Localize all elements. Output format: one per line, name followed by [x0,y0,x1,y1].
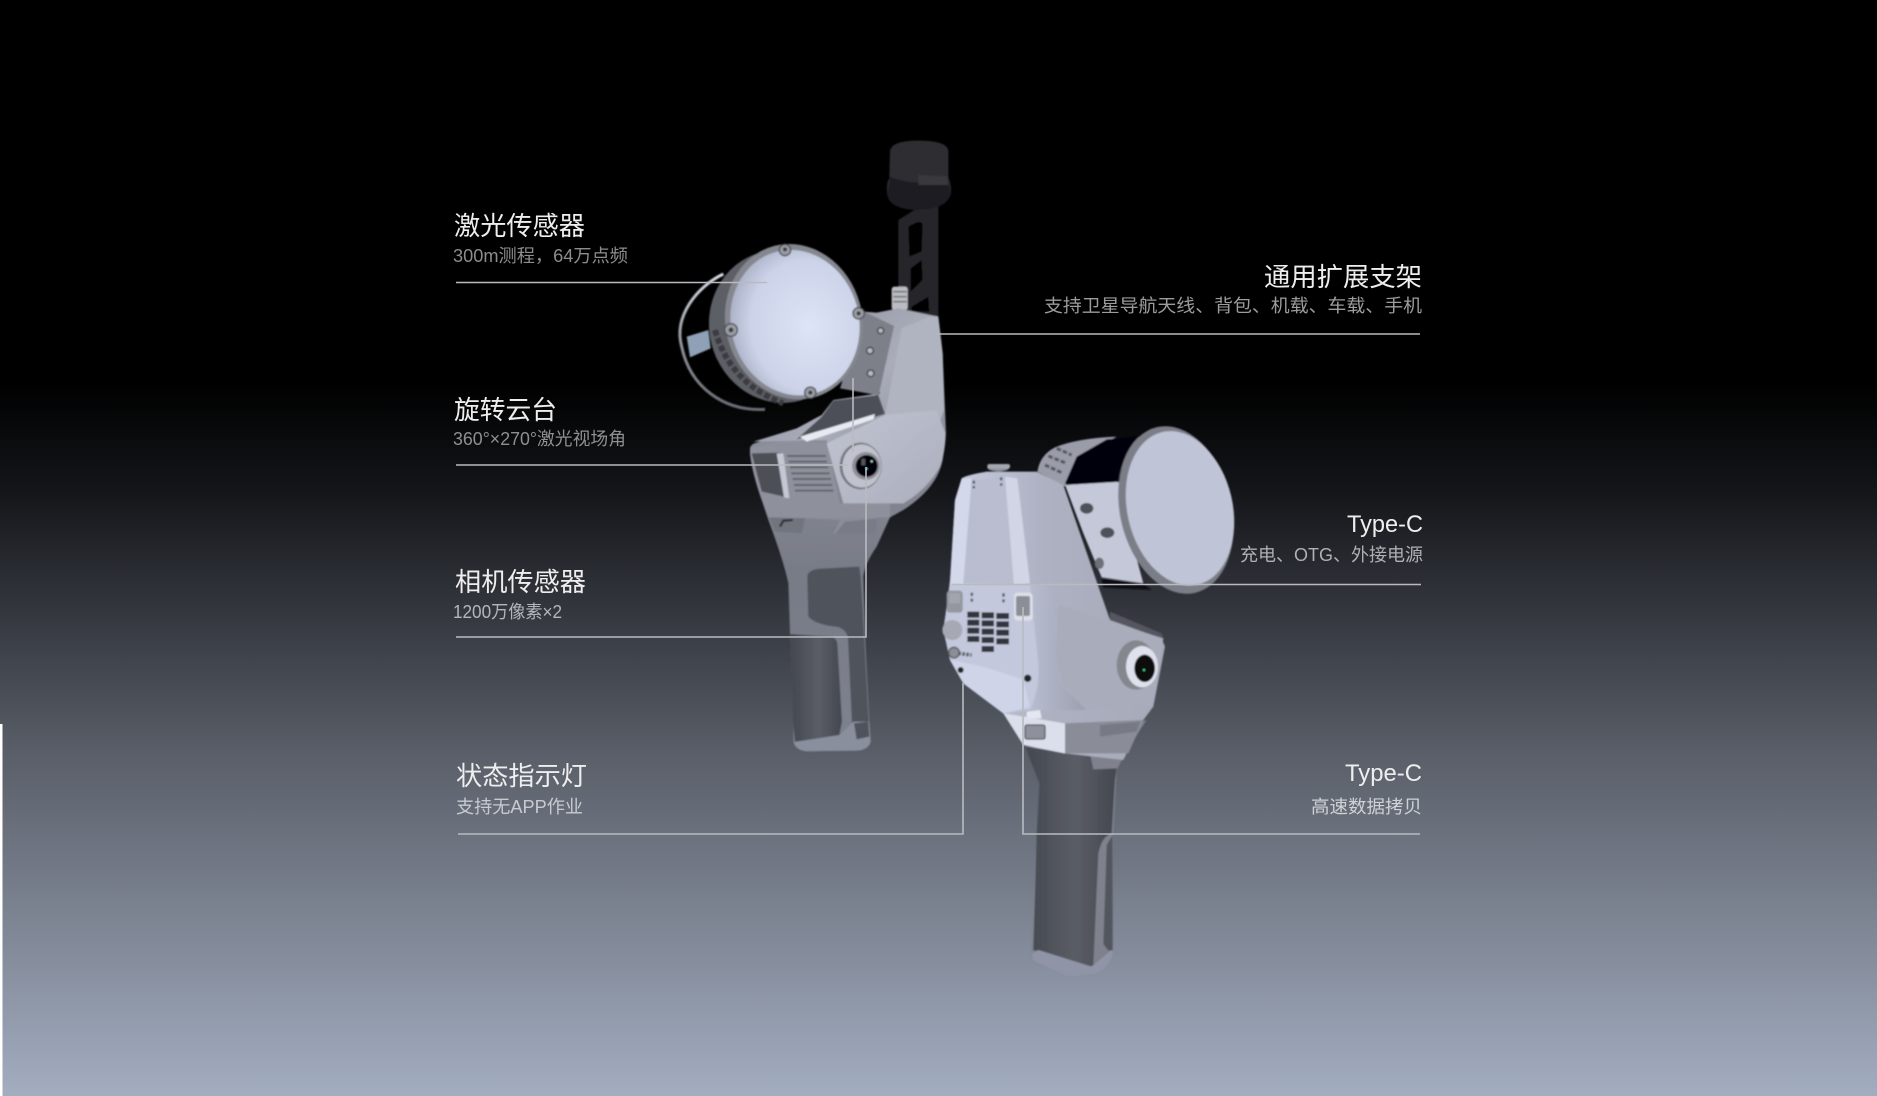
callout: 相机传感器: 1200万像素×2 [453,602,562,622]
callout: 通用扩展支架 [937,262,1422,334]
front camera on rear-view device [840,443,882,489]
callout: Type-C 数据拷贝: 高速数据拷贝 [1311,797,1422,817]
callout: 相机传感器: 相机传感器 [455,567,586,597]
device: front view scanner [942,415,1250,977]
callout: 相机传感器 [453,467,866,637]
callout: 旋转云台: 360°×270°激光视场角 [453,429,626,449]
laser head, right device [1037,415,1250,605]
callout: Type-C 数据拷贝: Type-C [1345,760,1422,787]
callout: 通用扩展支架: 通用扩展支架 [1264,262,1422,292]
handle [750,400,943,751]
laser disc, left device [692,228,880,419]
main body, right device [942,464,1165,760]
callout: Type-C 充电: Type-C [1347,511,1423,538]
antenna mount cap and bracket [887,141,951,317]
device: rear view scanner [680,141,951,751]
left white edge strip [0,724,2,1096]
callout: 旋转云台 [453,378,853,465]
callout: 激光传感器 [453,211,767,282]
callout: 激光传感器: 300m测程，64万点频 [453,246,628,266]
callout: 激光传感器: 激光传感器 [454,211,585,241]
callout: 状态指示灯: 状态指示灯 [456,761,587,791]
handle and grip, right device [1025,720,1147,977]
callout: 状态指示灯 [456,683,963,834]
callout: 旋转云台: 旋转云台 [454,395,557,425]
upper arm and side panel [753,308,946,503]
callout: Type-C 充电: 充电、OTG、外接电源 [1240,545,1423,565]
scanner back ring and strut [680,274,765,409]
callout: Type-C 数据拷贝 [1023,607,1422,834]
callout: Type-C 充电 [952,511,1423,584]
callout: 通用扩展支架: 支持卫星导航天线、背包、机载、车载、手机 [1044,296,1422,316]
callout: 状态指示灯: 支持无APP作业 [456,797,583,817]
